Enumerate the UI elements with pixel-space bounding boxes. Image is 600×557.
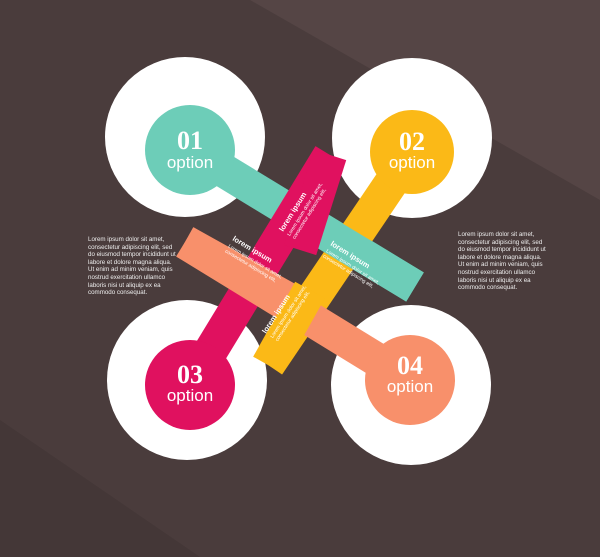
option circles: option — [167, 386, 213, 405]
band labels: Lorem ipsum dolor sit amet, — [269, 284, 308, 339]
band labels — [224, 176, 386, 343]
band labels: lorem ipsum — [277, 190, 309, 233]
band labels: consectetur adipiscing elit, — [291, 188, 328, 240]
bands — [185, 150, 415, 385]
band labels: consectetur adipiscing elit, — [322, 253, 374, 290]
band labels: lorem ipsum — [231, 234, 274, 265]
option circles: option — [167, 153, 213, 172]
band labels: consectetur adipiscing elit, — [274, 290, 311, 343]
option circles: 01 — [177, 126, 203, 155]
option circles — [145, 105, 455, 430]
white circles — [105, 57, 492, 465]
option circles: option — [387, 377, 433, 396]
band labels: Lorem ipsum dolor sit amet, — [227, 243, 283, 280]
option circles: option — [389, 153, 435, 172]
band labels: lorem ipsum — [260, 293, 292, 335]
left text: Lorem ipsum dolor sit amet, consectetur adipiscing elit, sed do eiusmod tempor incididunt ut labore et dolore magna aliqua. Ut enim ad minim veniam, quis nostrud exercitation ullamco laboris nisi ut aliquip ex ea commodo consequat. — [88, 236, 176, 296]
option circles: 02 — [399, 127, 425, 156]
band labels: Lorem ipsum dolor sit amet, — [286, 182, 324, 237]
band labels: Lorem ipsum dolor sit amet, — [325, 248, 380, 286]
right text: Lorem ipsum dolor sit amet, consectetur adipiscing elit, sed do eiusmod tempor incididunt ut labore et dolore magna aliqua. Ut enim ad minim veniam, quis nostrud exercitation ullamco laboris nisi ut aliquip ex ea commodo consequat. — [458, 231, 546, 291]
band labels: consectetur adipiscing elit, — [224, 249, 277, 284]
band labels: lorem ipsum — [329, 239, 372, 271]
option circles: 04 — [397, 351, 423, 380]
option circles: 03 — [177, 360, 203, 389]
